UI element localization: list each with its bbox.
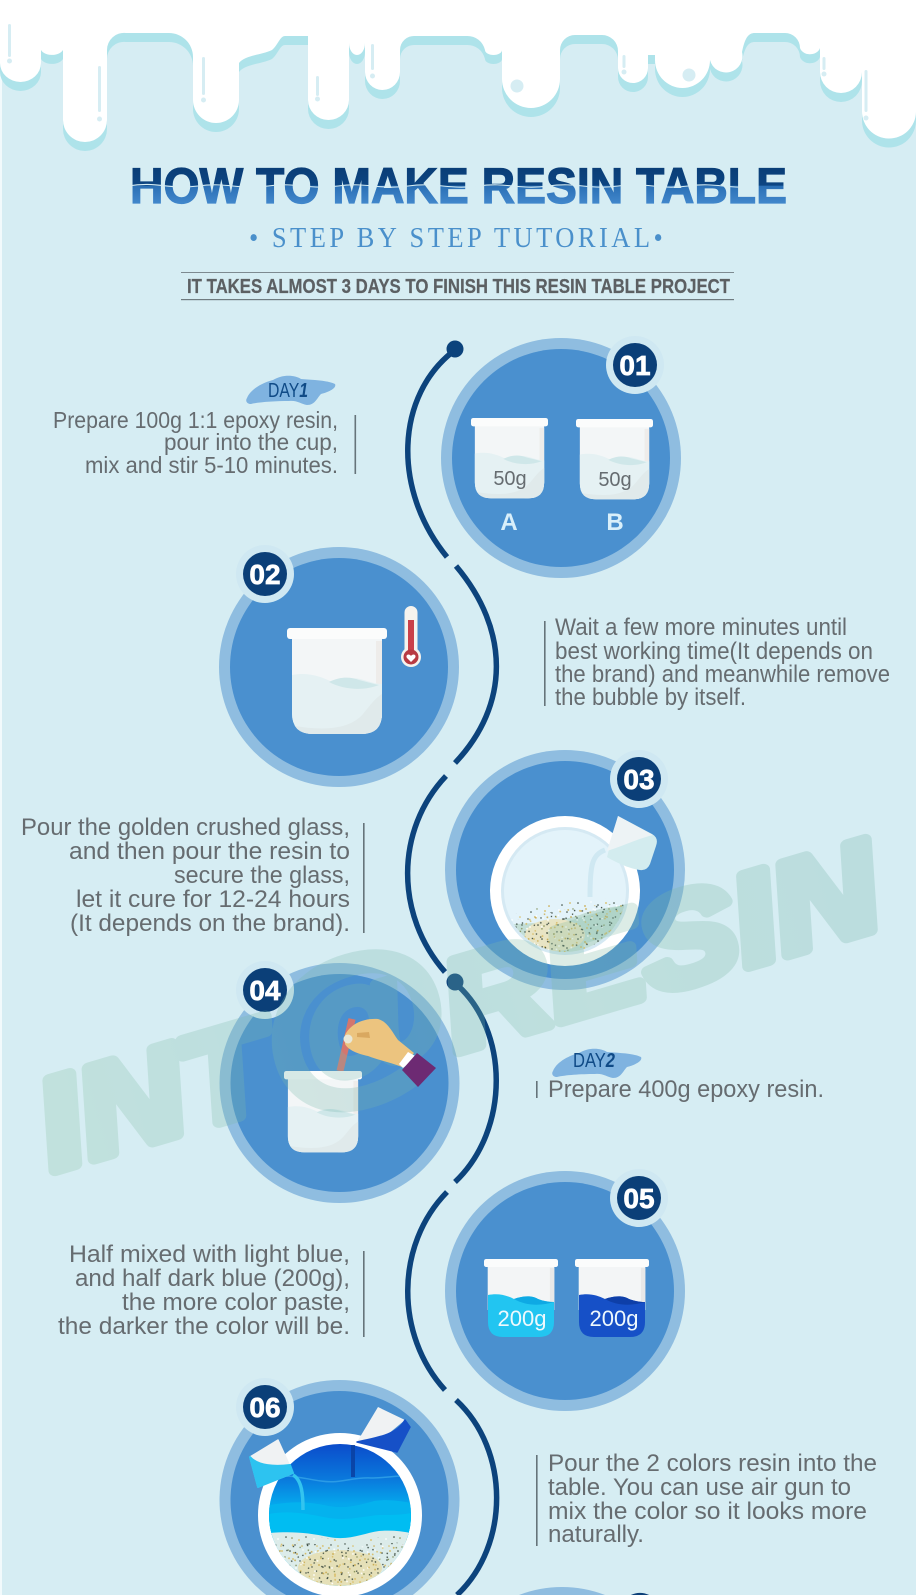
badge 02 [243,552,287,596]
step 6 text: naturally. [548,1521,644,1548]
step 5 text: Half mixed with light blue, [69,1241,350,1268]
step 6 text: table. You can use air gun to [548,1474,851,1501]
step 1 text: mix and stir 5-10 minutes. [85,452,338,478]
table mould with crushed glass [490,816,640,966]
left pouring cup [250,1440,293,1487]
step 4 text: Prepare 400g epoxy resin. [548,1076,824,1103]
step 1 text: pour into the cup, [164,429,338,455]
light resin stream [293,1475,303,1510]
label A: A [500,509,518,536]
badge 01: 01 [619,350,651,381]
step 2 text: best working time(It depends on [555,638,873,665]
step 1 text [53,407,356,478]
step 6 text [536,1450,877,1548]
step 07 panel cropped [519,1587,649,1595]
light blue cup [484,1259,558,1337]
drip highlights [7,24,868,122]
stir stick [340,1019,352,1071]
step 3 text [21,814,365,937]
step 05 panel [445,1169,685,1411]
step 5 text: and half dark blue (200g), [75,1265,350,1292]
badge 06 [243,1385,287,1429]
left edge strip [0,0,2,1595]
icon: thermometer [401,606,421,667]
badge 05: 05 [623,1183,655,1214]
badge 03 [617,757,661,801]
badge 03: 03 [623,764,655,795]
step 5 text [58,1241,365,1340]
timeline spine [408,350,497,1595]
step 01 panel [441,336,681,578]
cup B: 50g [598,469,632,491]
subtitle: • STEP BY STEP TUTORIAL• [249,221,663,253]
duration note: IT TAKES ALMOST 3 DAYS TO FINISH THIS RESIN TABLE PROJECT [187,276,730,298]
cup B [576,419,653,499]
step 2 text: the brand) and meanwhile remove [555,661,890,688]
step 3 text: let it cure for 12-24 hours [76,886,350,913]
table mould with blue resin [258,1433,422,1595]
step 2 text: Wait a few more minutes until [555,614,847,641]
step 6 text: Pour the 2 colors resin into the [548,1450,877,1477]
step 3 text: secure the glass, [174,862,350,889]
badge 01 [613,343,657,387]
day 1 tag: DAY1 [268,380,308,402]
icon: hand stirring [344,1019,436,1087]
step 03 panel [445,750,685,990]
step 3 text: (It depends on the brand). [70,910,350,937]
badge 05 [617,1176,661,1220]
badge 04: 04 [249,975,281,1006]
step 2 text [544,614,890,711]
drip white [0,0,916,142]
step 02 panel [219,545,459,787]
step 5 text: the more color paste, [122,1289,350,1316]
right pouring cup [357,1407,410,1452]
dark resin stream [351,1445,355,1477]
step 2 text: the bubble by itself. [555,684,746,711]
badge 04 [243,968,287,1012]
cup [287,628,387,734]
title: HOW TO MAKE RESIN TABLE [130,158,787,214]
cup [284,1071,362,1152]
step 5 text: the darker the color will be. [58,1313,350,1340]
dripping resin header [0,0,916,151]
step 6 text: mix the color so it looks more [548,1498,867,1525]
drip shadow [0,9,916,151]
step 04 panel [220,961,460,1203]
badge 02: 02 [249,559,281,590]
step 3 text: Pour the golden crushed glass, [21,814,350,841]
dark blue cup [575,1259,649,1337]
step 06 panel [220,1378,460,1595]
step 3 text: and then pour the resin to [69,838,350,865]
label B: B [606,509,624,536]
day 2 tag: DAY2 [573,1050,615,1072]
step 1 text: Prepare 100g 1:1 epoxy resin, [53,407,338,433]
day 1 tag [246,376,335,405]
day 2 tag [552,1049,641,1078]
cup A: 50g [493,468,527,490]
timeline dot day 1 [446,340,464,358]
timeline dot day 2 [446,974,464,990]
light blue cup: 200g [498,1306,546,1331]
watermark: INT@RESIN [11,781,900,1204]
cup A [471,418,548,498]
dark blue cup: 200g [590,1306,638,1331]
pouring cup [590,816,657,897]
badge 06: 06 [249,1392,281,1423]
